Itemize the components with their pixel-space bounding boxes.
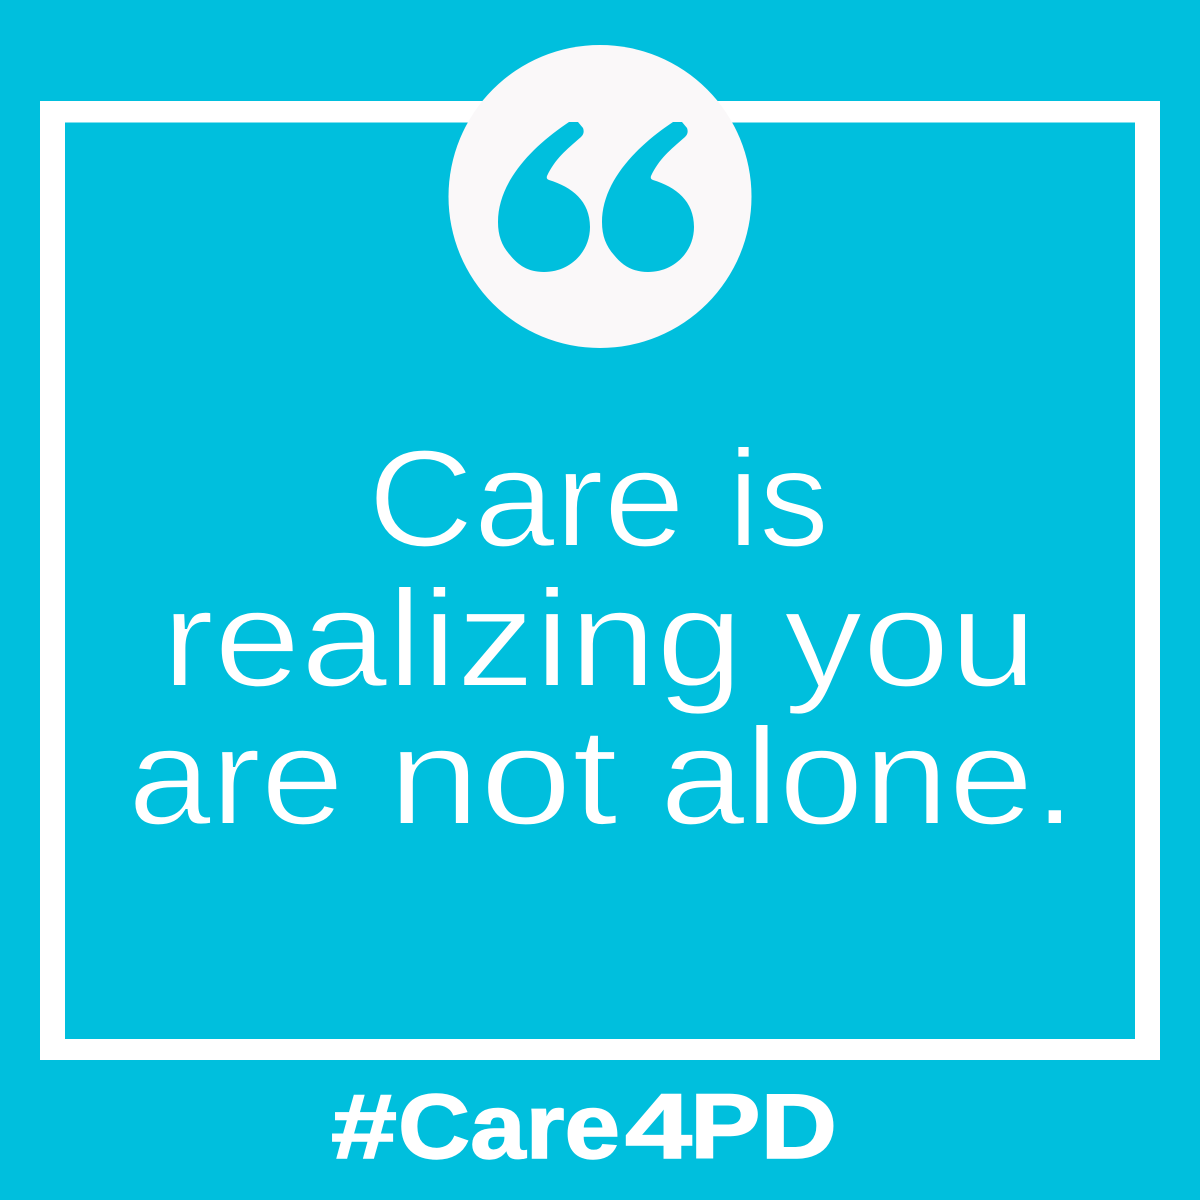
quote text: realizing <box>162 562 743 716</box>
white frame <box>40 101 1160 1060</box>
icon: quotation mark badge <box>448 45 752 348</box>
hashtag: PD <box>690 1076 837 1178</box>
quote text: alone. <box>660 700 1076 854</box>
quote text: is <box>728 422 829 576</box>
hashtag: Care <box>398 1076 620 1178</box>
hashtag: 4 <box>625 1076 692 1178</box>
hashtag: # <box>331 1076 397 1178</box>
quote text: you <box>784 562 1037 716</box>
quote text: Care <box>368 422 685 576</box>
hashtag <box>331 1076 837 1178</box>
quote text: not <box>388 700 618 854</box>
quote text: are <box>128 700 344 854</box>
quote text <box>128 422 1076 854</box>
